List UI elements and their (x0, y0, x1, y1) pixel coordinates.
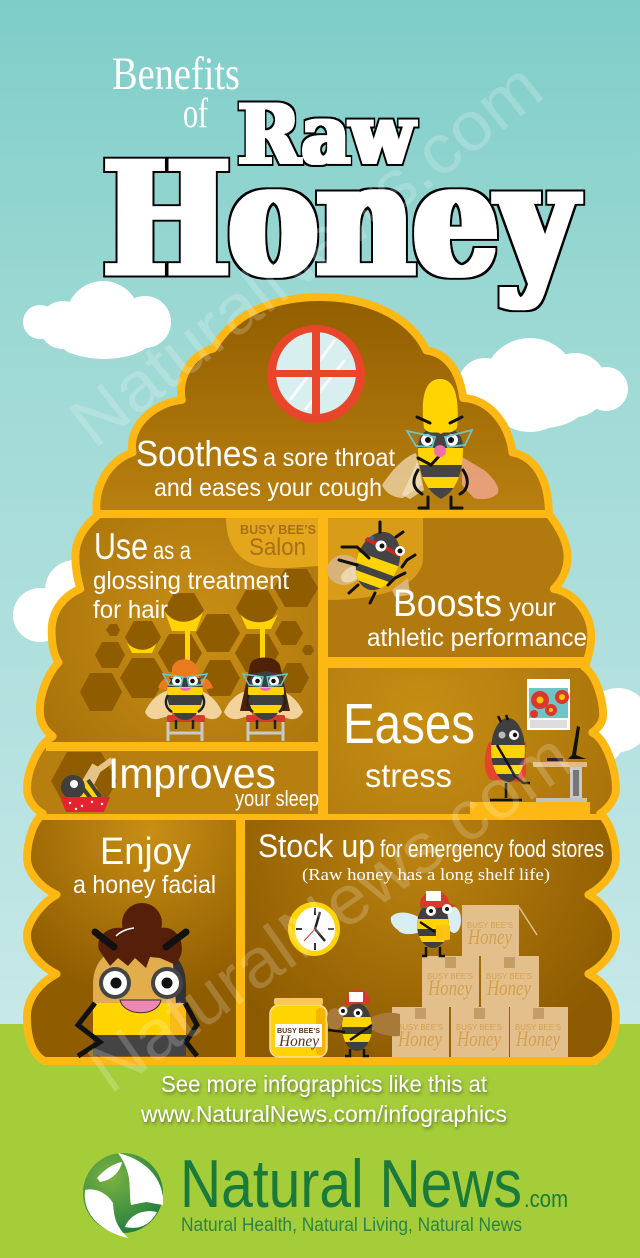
box (422, 956, 479, 1007)
icon: hexagon and bee in bed (51, 752, 117, 812)
title (104, 48, 579, 311)
box (392, 1007, 449, 1057)
heading: Stock up: (Raw honey has a long shelf life) (302, 865, 550, 884)
salon sign (226, 518, 318, 568)
desk (533, 762, 587, 767)
light circle behind athlete (328, 518, 423, 600)
heading: Boosts: athletic performance (367, 624, 587, 652)
title: Raw: Raw (238, 88, 416, 183)
heading: Boosts: Boosts (393, 583, 502, 625)
box (451, 1007, 509, 1057)
heading: Use as a glossing treatment: Use (94, 526, 148, 567)
watermark: NaturalNews.com (55, 46, 556, 462)
bee at desk (470, 715, 590, 814)
footer call to action: See more infographics like this at (161, 1071, 488, 1097)
hive panels (30, 301, 612, 1057)
boxes (392, 905, 568, 1057)
footer call to action: www.NaturalNews.com/infographics (140, 1101, 507, 1127)
heading: Use as a glossing treatment: as a (153, 537, 191, 565)
heading: Boosts: your (509, 594, 556, 622)
honeycomb (80, 569, 318, 711)
salon sign text: BUSY BEE’S (240, 522, 316, 537)
heading: Enjoy a honey facial: a honey facial (73, 871, 216, 899)
heading: Use as a glossing treatment (93, 526, 289, 624)
heading: Eases stress (343, 692, 475, 794)
heading: Soothes (136, 433, 395, 502)
heading: Use as a glossing treatment: for hair (93, 596, 168, 624)
box: BUSY BEE’S (427, 971, 473, 981)
heading: Eases stress: Eases (343, 692, 475, 756)
grass (0, 1024, 640, 1258)
hive outline (27, 297, 616, 1061)
box: BUSY BEE’S (515, 1022, 561, 1032)
icon: round window (267, 325, 365, 423)
heading: Eases stress: stress (365, 757, 452, 794)
box: BUSY BEE’S (486, 971, 532, 981)
box: BUSY BEE’S (467, 920, 513, 930)
bee: red cap with jar (327, 990, 400, 1056)
platform (470, 802, 590, 814)
honey jar (270, 998, 327, 1057)
cloud: upper left (23, 281, 171, 359)
title: Benefits: Benefits (112, 48, 240, 100)
cloud: right (458, 338, 628, 432)
logo: wordmark: Natural News (180, 1146, 522, 1222)
box (481, 956, 539, 1007)
heading: Soothes: a sore throat (263, 444, 395, 472)
box: Honey (397, 1026, 442, 1051)
watermark: NaturalNews.com (74, 716, 586, 1107)
cloud: mid right (576, 688, 640, 764)
heading: Improves your sleep: Improves (108, 750, 276, 798)
logo: wordmark: Natural Health, Natural Living, Natural News (181, 1215, 522, 1236)
heading: Soothes: Soothes (136, 433, 258, 474)
heading: Stock up: Stock up (258, 828, 375, 864)
bee: athlete flying (327, 522, 415, 603)
heading: Boosts (367, 583, 587, 652)
footer call to action (140, 1071, 507, 1127)
bee: orange hair in chair (145, 659, 222, 741)
bee: brown hair in chair (224, 658, 303, 741)
icon: wall clock (288, 902, 340, 956)
heading: Use as a glossing treatment: glossing treatment (93, 567, 289, 595)
heading: Improves your sleep: your sleep (235, 786, 319, 811)
heading: Stock up (258, 828, 604, 884)
honey jar: BUSY BEE’S (277, 1026, 320, 1035)
title: of: of (183, 91, 208, 137)
box: Honey (486, 975, 531, 1000)
hive (0, 285, 640, 1068)
salon sign text: Salon (249, 534, 306, 561)
watermark (55, 46, 586, 1107)
bee: honey facial (78, 903, 197, 1057)
box: BUSY BEE’S (456, 1022, 502, 1032)
heading: Soothes: and eases your cough (154, 474, 382, 502)
bee: red cap on boxes (391, 891, 461, 956)
box: BUSY BEE’S (397, 1022, 443, 1032)
honey drips (127, 612, 278, 662)
honey jar: Honey (278, 1033, 320, 1050)
wings (382, 453, 422, 498)
bee: yellow hair tasting honey (382, 379, 498, 508)
heading: Enjoy a honey facial: Enjoy (100, 831, 191, 873)
box: Honey (427, 975, 472, 1000)
box (462, 905, 537, 956)
box: Honey (456, 1026, 501, 1051)
heading: Improves your sleep (108, 750, 319, 811)
heading: Enjoy a honey facial (73, 831, 216, 899)
calendar (527, 679, 570, 730)
cloud: mid left (13, 560, 105, 642)
box: Honey (467, 924, 512, 949)
box: Honey (515, 1026, 560, 1051)
box (510, 1007, 568, 1057)
salon sign text (240, 522, 316, 561)
logo: wordmark: .com (524, 1186, 568, 1213)
logo: globe (83, 1153, 163, 1238)
